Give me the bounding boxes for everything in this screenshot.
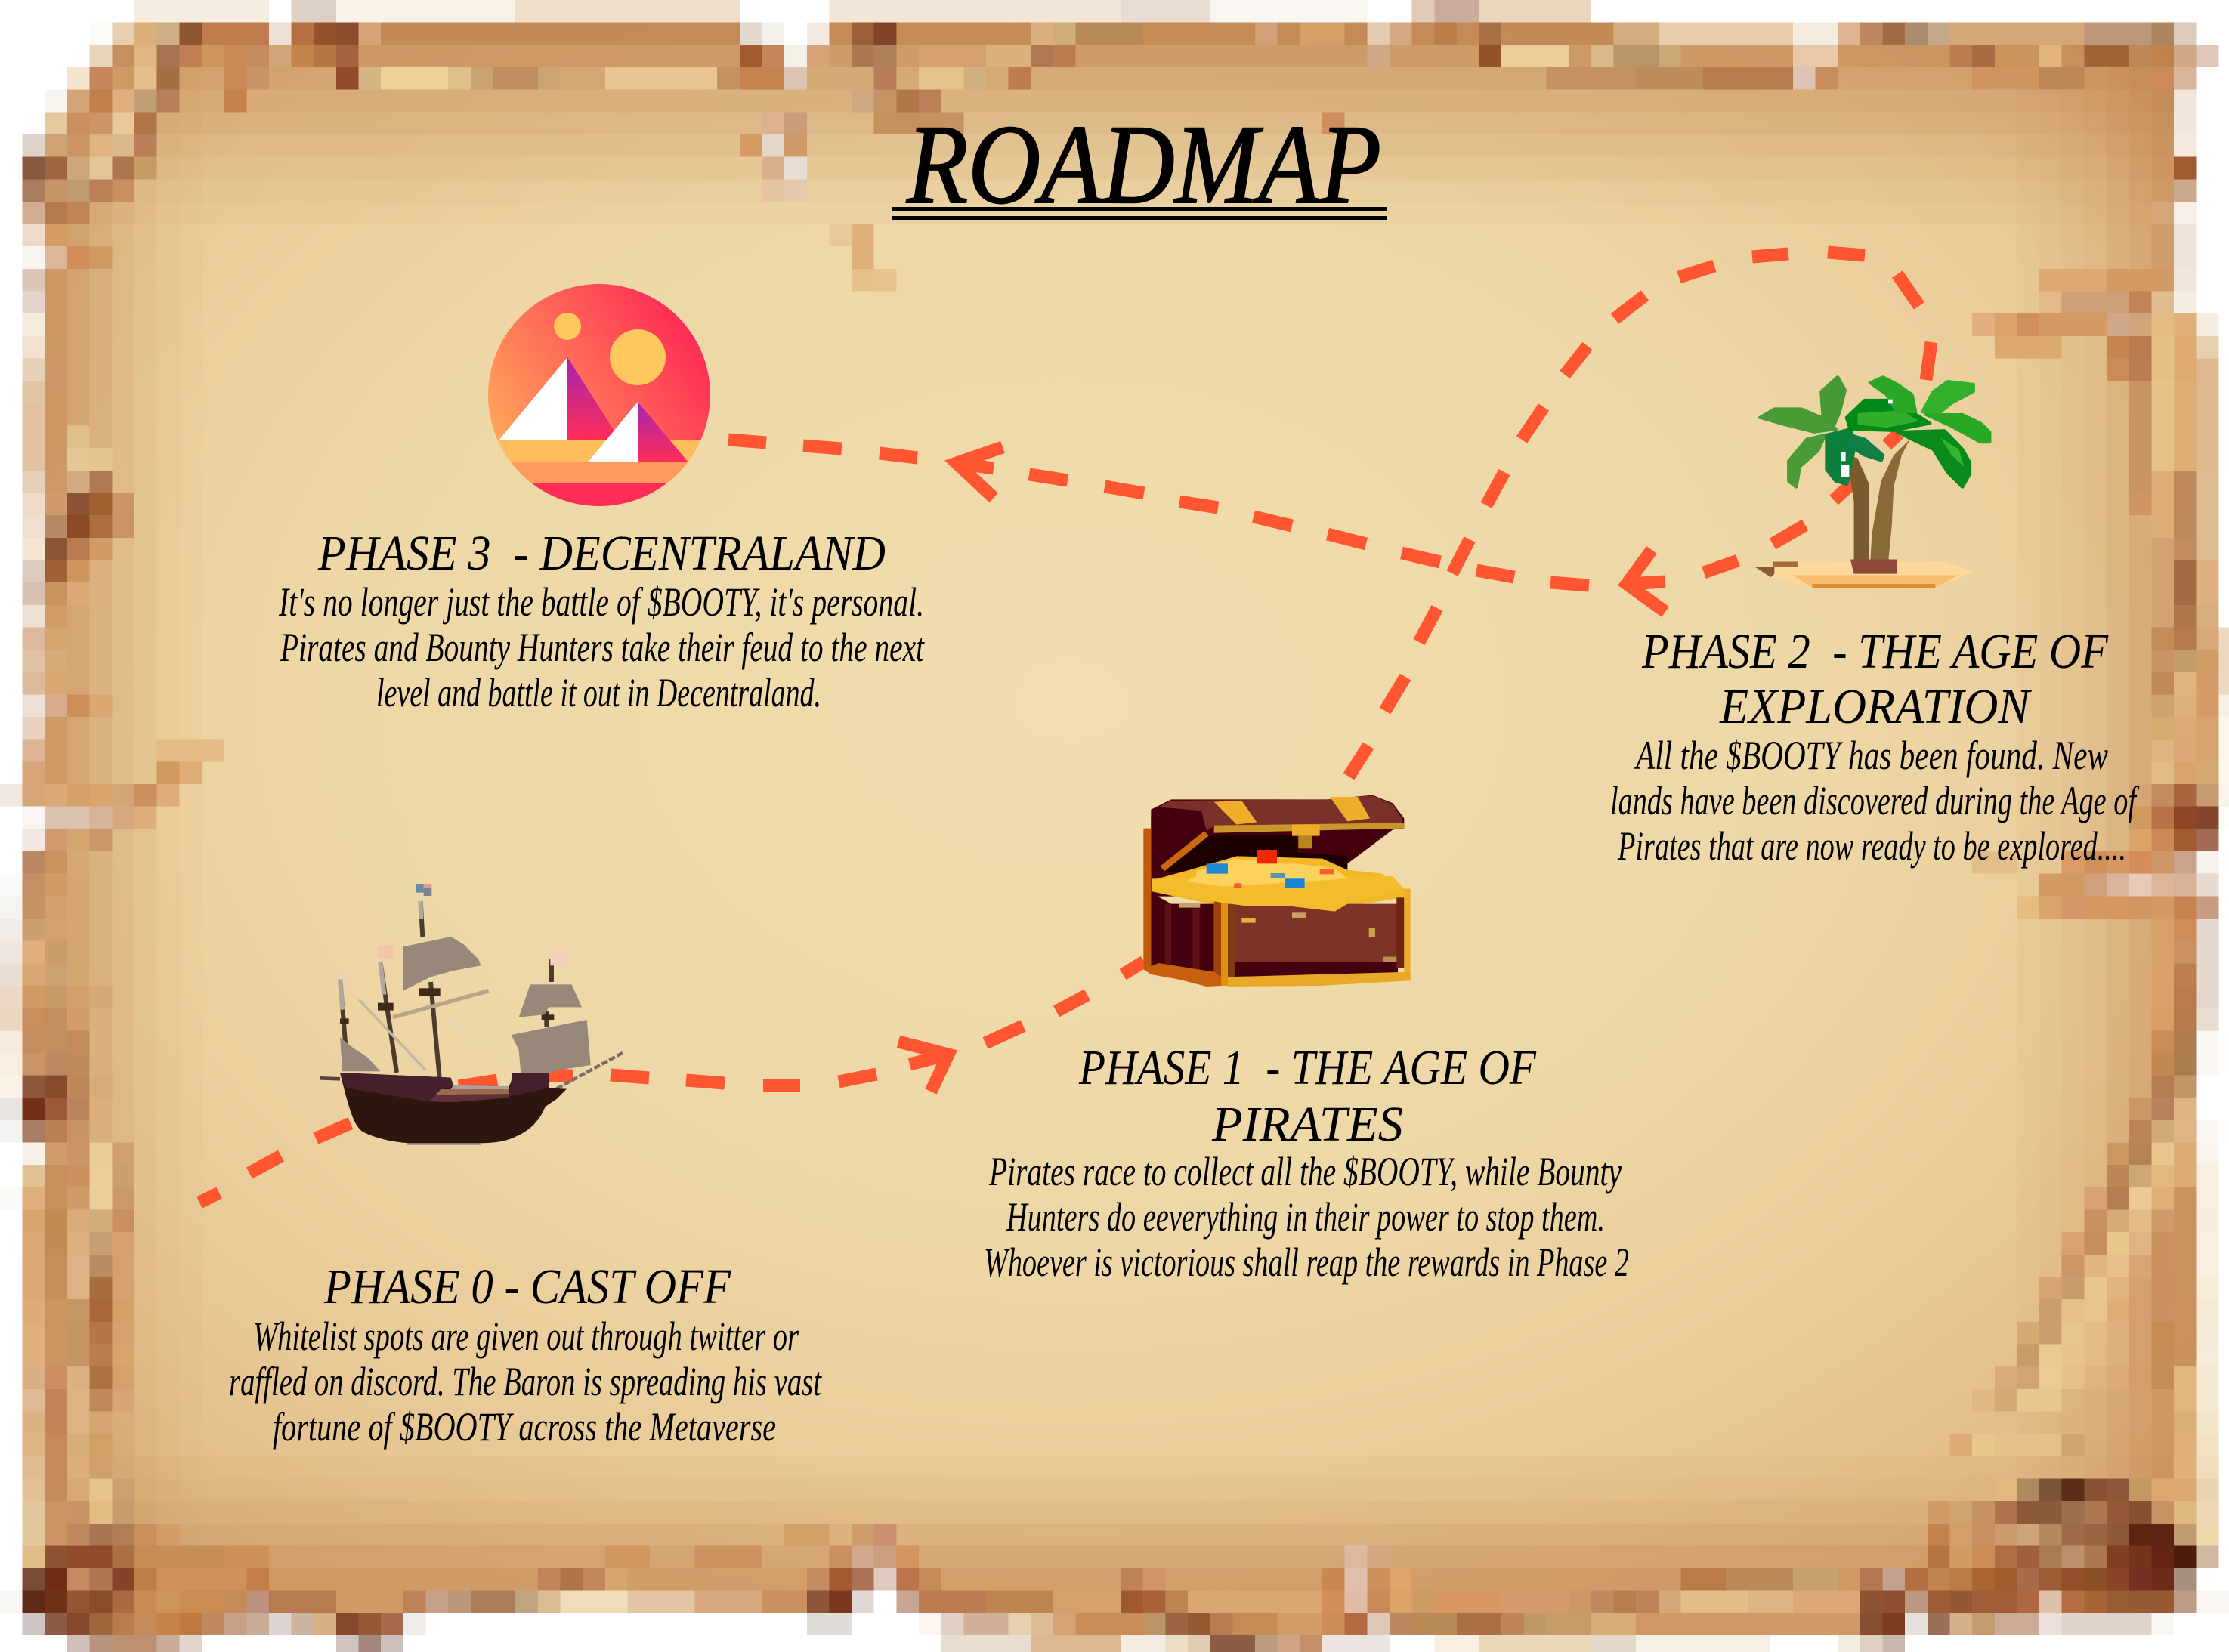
phase 1 text: PHASE 1 - THE AGE OF: [1078, 1040, 1537, 1095]
phase 3 text: Pirates and Bounty Hunters take their feud to the next: [280, 625, 925, 670]
icon: decentraland logo: [484, 284, 718, 508]
dashed treasure route with arrows: [199, 252, 1931, 1203]
phase 3 text: It's no longer just the battle of $BOOTY, it's personal.: [278, 579, 924, 625]
phase 1 text: Hunters do eeverything in their power to stop them.: [1006, 1194, 1605, 1240]
icon: pirate ship: [320, 884, 623, 1145]
phase 2 text: PHASE 2 - THE AGE OF: [1641, 624, 2109, 679]
phase 1 text: Pirates race to collect all the $BOOTY, while Bounty: [988, 1149, 1622, 1194]
icon: treasure chest: [1143, 795, 1411, 987]
phase 3 text: [278, 526, 925, 715]
infographic content: [196, 127, 2140, 1449]
phase 0 text: raffled on discord. The Baron is spreading his vast: [229, 1359, 822, 1404]
phase 1 text: [984, 1040, 1629, 1285]
title: ROADMAP: [906, 102, 1381, 227]
icon: palm tree island: [1754, 377, 1989, 588]
phase 1 text: PIRATES: [1211, 1097, 1403, 1152]
phase 0 text: [229, 1259, 822, 1450]
left and right paper edge: [0, 605, 2229, 1545]
phase 2 text: [1610, 624, 2140, 869]
phase 3 text: level and battle it out in Decentraland.: [376, 670, 821, 715]
phase 0 text: fortune of $BOOTY across the Metaverse: [273, 1404, 776, 1450]
bottom paper edge: [0, 1545, 2229, 1652]
phase 0 text: PHASE 0 - CAST OFF: [323, 1259, 731, 1314]
phase 2 text: EXPLORATION: [1719, 679, 2033, 734]
top and bottom paper edge: [0, 0, 2229, 605]
phase 0 text: Whitelist spots are given out through twitter or: [253, 1314, 799, 1359]
phase 1 text: Whoever is victorious shall reap the rewards in Phase 2: [984, 1240, 1629, 1285]
phase 3 text: PHASE 3 - DECENTRALAND: [317, 526, 886, 581]
